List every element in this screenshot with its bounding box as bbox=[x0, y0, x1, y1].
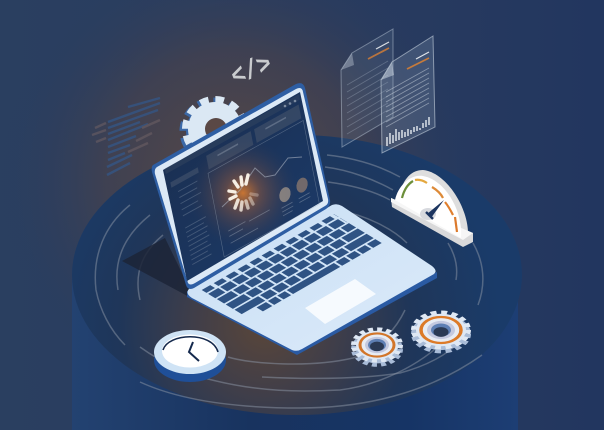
documents bbox=[341, 29, 435, 153]
code panel bbox=[92, 98, 160, 175]
bar chart bbox=[387, 117, 429, 146]
laptop shadow bbox=[122, 238, 195, 300]
gauge scale bbox=[402, 180, 457, 232]
gear 2 bbox=[414, 312, 468, 351]
table: cylinder body bbox=[72, 280, 518, 430]
gauge bbox=[391, 170, 473, 247]
camera dots bbox=[284, 100, 296, 107]
document 2 bbox=[381, 36, 435, 153]
document 1 bbox=[341, 29, 393, 147]
line chart bbox=[222, 157, 302, 207]
laptop screen bbox=[152, 83, 330, 289]
icon: settings gear bbox=[184, 100, 244, 160]
trackpad bbox=[305, 279, 376, 324]
gauge needle bbox=[420, 200, 444, 220]
table: concentric rings bbox=[95, 155, 483, 408]
table: round top bbox=[72, 135, 522, 415]
code symbol: </> bbox=[227, 50, 277, 93]
laptop base bbox=[187, 272, 437, 355]
clock bbox=[154, 330, 226, 382]
laptop bbox=[122, 83, 437, 355]
gear 1 bbox=[354, 329, 400, 365]
dashboard content bbox=[165, 94, 320, 278]
loading spinner bbox=[229, 175, 257, 210]
keyboard bbox=[204, 215, 379, 317]
